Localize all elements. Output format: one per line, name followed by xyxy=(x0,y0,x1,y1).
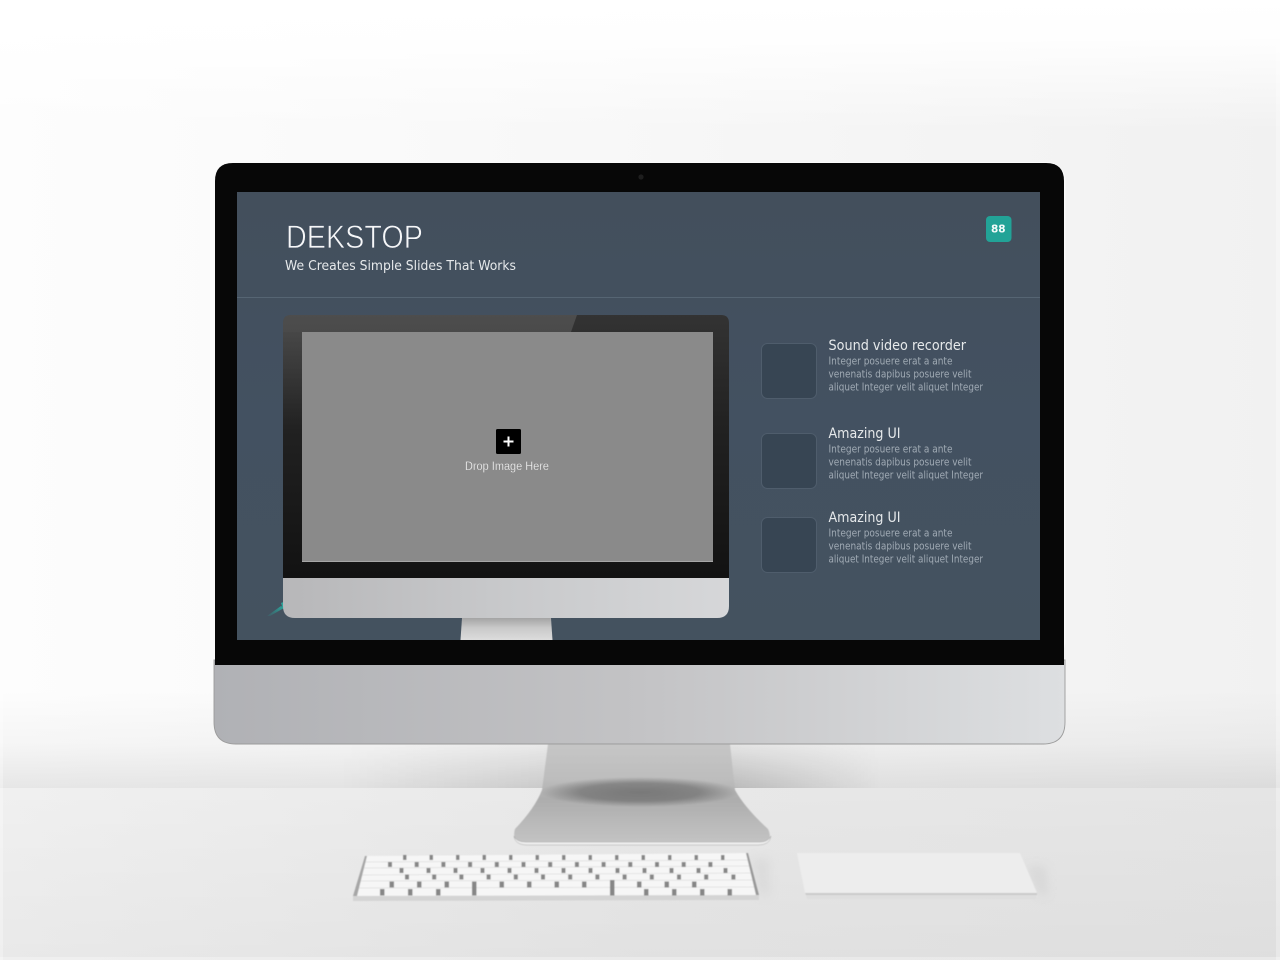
feature text xyxy=(828,354,983,394)
icon box xyxy=(762,518,816,572)
feature text: Integer posuere erat a ante xyxy=(828,526,953,540)
page number badge xyxy=(986,216,1012,242)
mini monitor neck xyxy=(460,618,552,640)
keyboard xyxy=(353,853,770,901)
feature: sound video recorder xyxy=(762,338,983,398)
feature text: aliquet Integer velit aliquet Integer xyxy=(828,468,983,482)
feature text: venenatis dapibus posuere velit xyxy=(828,540,972,552)
icon: webcam xyxy=(638,174,644,180)
title: DEKSTOP xyxy=(286,219,423,255)
icon box xyxy=(762,344,816,398)
feature: amazing ui 2 xyxy=(762,510,983,572)
bezel glare xyxy=(283,315,577,332)
placeholder label: Drop Image Here xyxy=(465,459,549,473)
trackpad xyxy=(797,853,1048,899)
panel: slide xyxy=(237,192,1040,640)
page number badge: 88 xyxy=(991,224,1006,236)
feature: amazing ui 1 xyxy=(762,426,983,488)
subtitle: We Creates Simple Slides That Works xyxy=(285,258,516,274)
icon box xyxy=(762,434,816,488)
image placeholder xyxy=(302,332,713,562)
mini monitor chin xyxy=(283,578,729,618)
key gaps xyxy=(380,855,735,896)
feature text: Integer posuere erat a ante xyxy=(828,354,953,368)
keyboard edges xyxy=(353,856,367,896)
monitor xyxy=(214,162,1066,744)
feature text: Integer posuere erat a ante xyxy=(828,442,953,456)
mini monitor bezel xyxy=(283,315,729,578)
feature text xyxy=(828,526,983,566)
feature text: aliquet Integer velit aliquet Integer xyxy=(828,552,983,566)
mini monitor xyxy=(283,315,729,640)
icon: plus xyxy=(496,429,521,454)
monitor chin xyxy=(214,660,1065,744)
feature text: venenatis dapibus posuere velit xyxy=(828,456,972,468)
monitor white edge xyxy=(214,162,1066,659)
feature heading: Amazing UI xyxy=(828,510,900,526)
desk surface xyxy=(0,788,1280,960)
monitor stand xyxy=(514,744,771,845)
feature text xyxy=(828,442,983,482)
feature heading: Amazing UI xyxy=(828,426,900,442)
feature heading: Sound video recorder xyxy=(828,338,966,354)
teal accent behind mini monitor xyxy=(267,601,288,616)
feature text: aliquet Integer velit aliquet Integer xyxy=(828,380,983,394)
monitor shadow on wall xyxy=(406,744,847,788)
feature text: venenatis dapibus posuere velit xyxy=(828,368,972,380)
monitor black bezel xyxy=(215,163,1064,665)
